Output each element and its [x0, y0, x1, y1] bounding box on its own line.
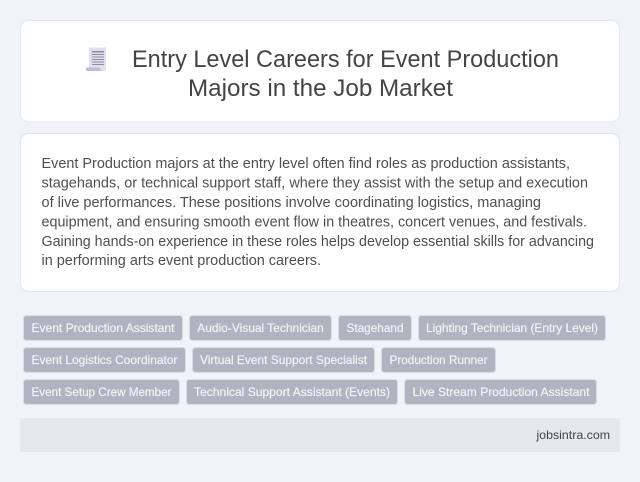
- tag: Virtual Event Support Specialist: Virtual Event Support Specialist: [200, 353, 368, 367]
- panel: header: [20, 20, 620, 122]
- tag: Event Logistics Coordinator: [24, 348, 186, 372]
- tag: Live Stream Production Assistant: Live Stream Production Assistant: [412, 385, 590, 399]
- text block: description: equipment, and ensuring smooth event flow in theatres, concert venues, and festivals.: [42, 214, 587, 230]
- text block: description: Event Production majors at the entry level often find roles as production assistants,: [42, 156, 570, 172]
- text block: description: Gaining hands-on experience in these roles helps develop essential skills for advancing: [42, 234, 594, 250]
- tag: Technical Support Assistant (Events): Technical Support Assistant (Events): [194, 385, 390, 399]
- title: Entry Level Careers for Event Production: [132, 46, 559, 73]
- tag: Lighting Technician (Entry Level): [418, 316, 606, 340]
- tag: Lighting Technician (Entry Level): Lighting Technician (Entry Level): [426, 321, 598, 335]
- tag: Stagehand: [338, 316, 412, 340]
- tag: Event Setup Crew Member: Event Setup Crew Member: [32, 385, 172, 399]
- tag: Event Setup Crew Member: [24, 380, 180, 404]
- tag: Audio-Visual Technician: [190, 316, 332, 340]
- tag: Virtual Event Support Specialist: [192, 348, 374, 372]
- tag: Event Production Assistant: [24, 316, 182, 340]
- title: Majors in the Job Market: [188, 75, 453, 102]
- panel: description: [20, 134, 620, 292]
- footer: [20, 418, 620, 452]
- tag: Audio-Visual Technician: Audio-Visual Technician: [197, 321, 324, 335]
- icon: paper scroll document: [86, 48, 106, 71]
- footer: jobsintra.com: [535, 428, 610, 442]
- text block: description: [42, 156, 594, 269]
- title: [132, 46, 559, 102]
- tag: Technical Support Assistant (Events): [186, 380, 398, 404]
- tag: Production Runner: [382, 348, 496, 372]
- tag: Event Production Assistant: Event Production Assistant: [32, 321, 175, 335]
- text block: description: stagehands, or technical support staff, where they assist with the setup and execution: [42, 176, 588, 192]
- tag: Production Runner: Production Runner: [390, 353, 488, 367]
- text block: description: of live performances. These positions involve coordinating logistics, managing: [42, 195, 541, 211]
- tag: Event Logistics Coordinator: Event Logistics Coordinator: [32, 353, 178, 367]
- tag list: job titles: [24, 316, 606, 404]
- tag: Stagehand: Stagehand: [346, 321, 404, 335]
- text block: description: in performing arts event production careers.: [42, 253, 321, 269]
- tag: Live Stream Production Assistant: [404, 380, 596, 404]
